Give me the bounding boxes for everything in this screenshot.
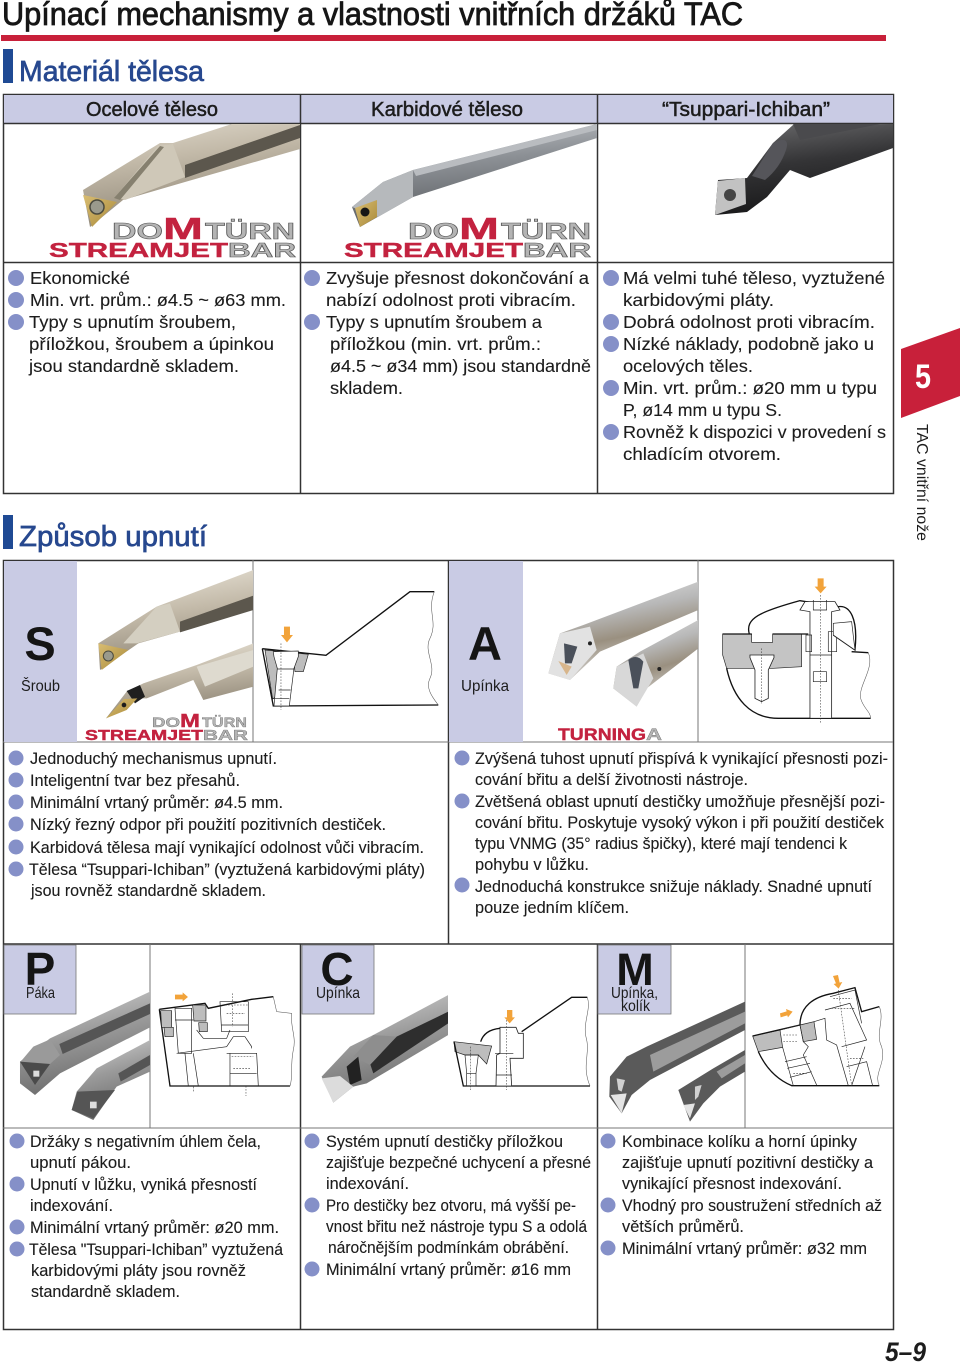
- list: P features: [10, 1133, 284, 1301]
- photo: M holders: [609, 1002, 745, 1122]
- list: P features: Minimální vrtaný průměr: ø20 mm.: [30, 1219, 279, 1237]
- side tab: chapter 5: 5: [915, 358, 931, 396]
- diagram: C clamp mechanism: [454, 997, 590, 1090]
- list: carbide body: skladem.: [330, 378, 403, 398]
- list: carbide body: [304, 268, 591, 398]
- logo: DoMTurn StreamJetBar: DO: [408, 218, 459, 244]
- list: S features: jsou rovněž standardně skladem.: [30, 882, 266, 900]
- header: Tsuppari-Ichiban: “Tsuppari-Ichiban”: [662, 98, 830, 121]
- badge: M: [598, 944, 671, 1015]
- list: Tsuppari-Ichiban: Rovněž k dispozici v provedení s: [623, 422, 886, 442]
- list: A features: typu VNMG (35° radius špičky), které mají tendenci k: [475, 835, 848, 853]
- badge: C: C: [320, 943, 354, 995]
- list: Tsuppari-Ichiban: Dobrá odolnost proti vibracím.: [623, 312, 875, 332]
- section: C clamp: [302, 943, 591, 1279]
- list: P features: Držáky s negativním úhlem čela,: [30, 1133, 261, 1151]
- logo: DoMTurn StreamJetBar: BAR: [203, 728, 249, 744]
- badge: A: [449, 561, 523, 742]
- list: S features: Jednoduchý mechanismus upnutí.: [30, 750, 277, 768]
- badge: C: Upínka: [316, 985, 360, 1002]
- logo: DoMTurn StreamJetBar: [85, 711, 249, 744]
- list: C features: vnost břitu než nástroje typu S a odolá: [326, 1218, 588, 1236]
- list: steel body: příložkou, šroubem a úpinkou: [29, 334, 274, 354]
- list: S features: Karbidová tělesa mají vynikající odolnost vůči vibracím.: [30, 839, 424, 857]
- list: Tsuppari-Ichiban: karbidovými pláty.: [623, 290, 774, 310]
- header: Karbidové těleso: Karbidové těleso: [371, 98, 523, 121]
- diagram: screw clamping: [262, 592, 438, 710]
- list: steel body: [8, 268, 286, 376]
- list: Tsuppari-Ichiban: P, ø14 mm u typu S.: [623, 400, 782, 420]
- photo: screw holders: [98, 570, 253, 718]
- list: M features: Minimální vrtaný průměr: ø32 mm: [622, 1240, 867, 1258]
- list: C features: náročnějším podmínkám obrábění.: [328, 1239, 569, 1257]
- heading: Materiál tělesa: Materiál tělesa: [19, 56, 205, 88]
- logo: DoMTurn StreamJetBar: [344, 211, 592, 262]
- list: carbide body: Zvyšuje přesnost dokončování a: [326, 268, 589, 288]
- list: carbide body: Typy s upnutím šroubem a: [326, 312, 542, 332]
- section: S screw: [4, 561, 438, 900]
- logo: DoMTurn StreamJetBar: DO: [112, 218, 163, 244]
- list: carbide body: nabízí odolnost proti vibracím.: [326, 290, 576, 310]
- photo: steel holder: [83, 124, 300, 227]
- list: steel body: Min. vrt. prům.: ø4.5 ~ ø63 mm.: [30, 290, 286, 310]
- list: C features: Minimální vrtaný průměr: ø16 mm: [326, 1261, 571, 1279]
- badge: A: Upínka: [461, 678, 509, 695]
- section: A clamp: [449, 561, 888, 917]
- list: Tsuppari-Ichiban: chladícím otvorem.: [623, 444, 781, 464]
- heading: Způsob upnutí: Způsob upnutí: [19, 521, 207, 553]
- logo: DoMTurn StreamJetBar: BAR: [228, 240, 297, 262]
- list: Tsuppari-Ichiban: Nízké náklady, podobně jako u: [623, 334, 874, 354]
- badge: P: P: [25, 943, 55, 995]
- logo: DoMTurn StreamJetBar: STREAMJET: [85, 728, 203, 744]
- list: steel body: Typy s upnutím šroubem,: [29, 312, 236, 332]
- section: M pin clamp: [598, 944, 883, 1258]
- list: A features: pohybu v lůžku.: [475, 856, 589, 874]
- diagram: clamp mechanism: [723, 578, 871, 723]
- list: steel body: Ekonomické: [30, 268, 130, 288]
- badge: M: M: [616, 944, 654, 995]
- list: C features: zajišťuje bezpečné uchycení a přesné: [326, 1154, 591, 1172]
- list: Tsuppari-Ichiban: [603, 268, 886, 464]
- list: C features: indexování.: [326, 1175, 409, 1193]
- header: Ocelové těleso: Ocelové těleso: [86, 98, 218, 121]
- diagram: lever mechanism: [159, 992, 294, 1096]
- list: carbide body: příložkou (min. vrt. prům.:: [330, 334, 541, 354]
- badge: P: [4, 943, 76, 1014]
- badge: S: S: [24, 617, 56, 670]
- list: carbide body: ø4.5 ~ ø34 mm) jsou standardně: [330, 356, 591, 376]
- logo: DoMTurn StreamJetBar: TÜRN: [205, 218, 295, 244]
- list: steel body: jsou standardně skladem.: [28, 356, 239, 376]
- photo: carbide holder: [352, 124, 597, 227]
- list: P features: karbidovými pláty jsou rovněž: [31, 1262, 246, 1280]
- logo: DoMTurn StreamJetBar: TÜRN: [501, 218, 591, 244]
- panel: body material table: [3, 94, 894, 494]
- side tab: chapter 5: TAC vnitřní nože: [913, 424, 930, 541]
- badge: M: Upínka,: [611, 985, 658, 1002]
- diagram: pin and clamp mechanism: [753, 975, 883, 1086]
- title rule: [1, 35, 886, 41]
- list: M features: větších průměrů.: [622, 1218, 744, 1236]
- logo: DoMTurn StreamJetBar: BAR: [523, 240, 592, 262]
- list: P features: Upnutí v lůžku, vyniká přesností: [30, 1176, 257, 1194]
- logo: DoMTurn StreamJetBar: STREAMJET: [49, 240, 228, 262]
- list: P features: upnutí pákou.: [30, 1154, 131, 1172]
- list: A features: Zvýšená tuhost upnutí přispívá k vynikající přesnosti pozi-: [475, 750, 888, 768]
- photo: clamp holders: [548, 582, 698, 707]
- badge: S: [4, 561, 77, 742]
- list: S features: Nízký řezný odpor při použití pozitivních destiček.: [30, 816, 386, 834]
- list: C features: [304, 1133, 591, 1279]
- logo: DoMTurn StreamJetBar: STREAMJET: [344, 240, 523, 262]
- side tab: chapter 5: [901, 328, 960, 541]
- list: P features: indexování.: [30, 1197, 113, 1215]
- list: Tsuppari-Ichiban: Min. vrt. prům.: ø20 mm u typu: [623, 378, 877, 398]
- logo: TurningA: TURNING: [558, 725, 646, 744]
- list: M features: zajišťuje upnutí pozitivní destičky a: [622, 1154, 874, 1172]
- list: S features: Minimální vrtaný průměr: ø4.5 mm.: [30, 794, 283, 812]
- list: A features: cování břitu. Poskytuje vysoký výkon i při použití destiček: [475, 814, 885, 832]
- list: P features: Tělesa "Tsuppari-Ichiban” vyztužená: [29, 1241, 284, 1259]
- badge: S: Šroub: [21, 676, 60, 695]
- badge: P: Páka: [26, 985, 55, 1002]
- list: A features: pouze jedním klíčem.: [475, 899, 629, 917]
- list: S features: Tělesa “Tsuppari-Ichiban” (vyztužená karbidovými pláty): [29, 861, 425, 879]
- list: M features: [600, 1133, 882, 1258]
- section: P lever: [4, 943, 294, 1301]
- logo: TurningA: A: [646, 725, 662, 744]
- photo: lever holders: [20, 992, 150, 1120]
- photo: Tsuppari-Ichiban holder: [715, 124, 893, 215]
- list: A features: [454, 750, 888, 917]
- logo: DoMTurn StreamJetBar: M: [180, 711, 200, 731]
- logo: DoMTurn StreamJetBar: TÜRN: [202, 714, 247, 730]
- list: S features: [8, 750, 425, 900]
- badge: A: A: [468, 617, 502, 670]
- list: S features: Inteligentní tvar bez přesahů.: [30, 772, 240, 790]
- photo: C clamp holder: [322, 995, 448, 1103]
- list: A features: cování břitu a delší životnosti nástroje.: [475, 771, 748, 789]
- list: C features: Systém upnutí destičky příložkou: [326, 1133, 563, 1151]
- panel: clamping methods frame: [3, 560, 894, 1330]
- list: A features: Zvětšená oblast upnutí destičky umožňuje přesnější pozi-: [475, 793, 885, 811]
- list: M features: Kombinace kolíku a horní úpinky: [622, 1133, 858, 1151]
- badge: C: [302, 943, 374, 1014]
- list: M features: vynikající přesnost indexování.: [622, 1175, 842, 1193]
- badge: M: kolík: [621, 998, 650, 1015]
- list: M features: Vhodný pro soustružení středních až: [622, 1197, 882, 1215]
- list: P features: standardně skladem.: [31, 1283, 180, 1301]
- list: C features: Pro destičky bez otvoru, má vyšší pe-: [326, 1197, 576, 1215]
- logo: DoMTurn StreamJetBar: DO: [152, 714, 180, 730]
- list: Tsuppari-Ichiban: ocelových těles.: [623, 356, 753, 376]
- logo: DoMTurn StreamJetBar: [49, 211, 297, 262]
- list: Tsuppari-Ichiban: Má velmi tuhé těleso, vyztužené: [623, 268, 885, 288]
- logo: DoMTurn StreamJetBar: M: [459, 211, 499, 246]
- logo: DoMTurn StreamJetBar: M: [163, 211, 203, 246]
- list: A features: Jednoduchá konstrukce snižuje náklady. Snadné upnutí: [475, 878, 872, 896]
